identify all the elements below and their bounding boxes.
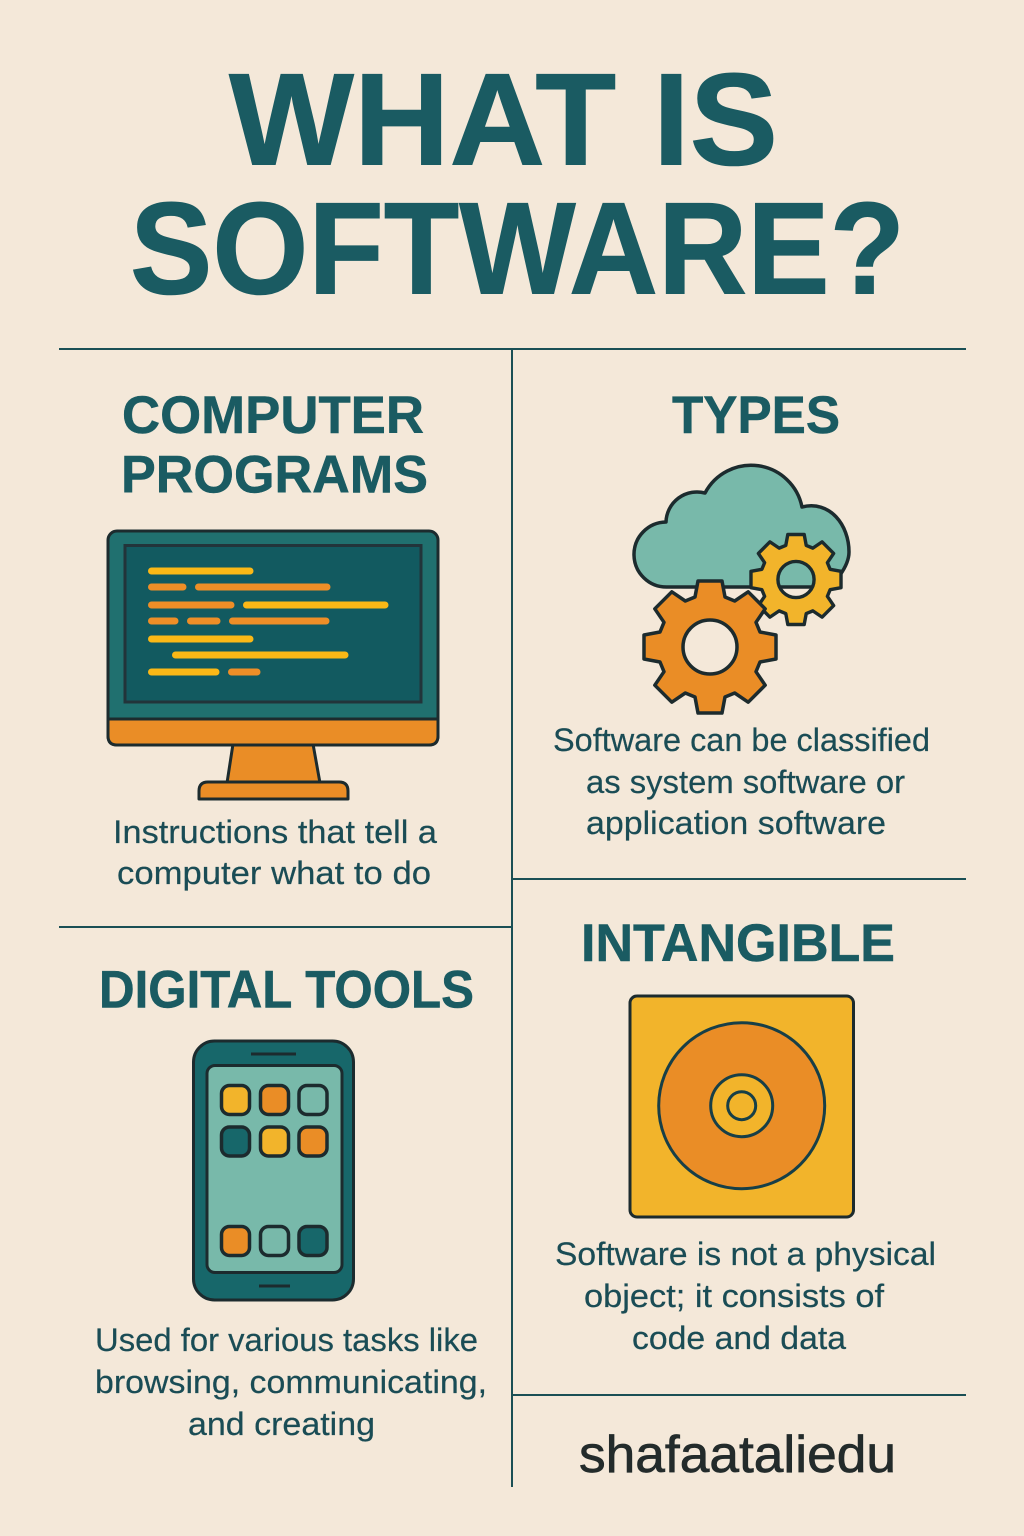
title	[130, 46, 905, 322]
title: SOFTWARE?	[130, 174, 905, 322]
text: intangible description: code and data	[632, 1320, 846, 1356]
text: computer programs description	[113, 814, 437, 891]
brand name: shafaataliedu	[579, 1426, 896, 1484]
panel: computer programs	[108, 386, 438, 891]
heading: computer programs: COMPUTER	[122, 386, 424, 445]
text: digital tools description	[95, 1322, 487, 1442]
icon: disc in square sleeve	[630, 996, 854, 1217]
icon: desktop monitor with code	[108, 531, 438, 799]
text: intangible description: object; it consists of	[584, 1278, 884, 1314]
small gear	[751, 534, 841, 625]
icon: cloud and gears	[634, 465, 849, 713]
text: computer programs description: Instructions that tell a	[113, 814, 437, 850]
text: types description: application software	[586, 805, 886, 841]
text: digital tools description: and creating	[188, 1406, 375, 1442]
text: types description	[553, 722, 930, 841]
large gear	[644, 581, 776, 713]
heading: computer programs	[121, 386, 428, 504]
heading: digital tools: DIGITAL TOOLS	[99, 960, 474, 1020]
heading: computer programs: PROGRAMS	[121, 446, 428, 504]
panel: types	[553, 386, 930, 841]
text: digital tools description: browsing, communicating,	[95, 1364, 487, 1400]
text: types description: as system software or	[586, 764, 905, 800]
heading: intangible: INTANGIBLE	[581, 914, 895, 973]
text: computer programs description: computer what to do	[117, 855, 431, 891]
heading: types: TYPES	[672, 386, 840, 445]
icon: smartphone with apps	[194, 1041, 354, 1300]
title: WHAT IS	[229, 46, 778, 192]
panel: digital tools	[95, 960, 487, 1442]
text: intangible description	[555, 1236, 936, 1356]
text: digital tools description: Used for various tasks like	[95, 1322, 478, 1358]
panel: intangible	[555, 914, 936, 1356]
text: intangible description: Software is not a physical	[555, 1236, 936, 1272]
text: types description: Software can be classified	[553, 722, 930, 758]
cloud	[634, 465, 849, 587]
